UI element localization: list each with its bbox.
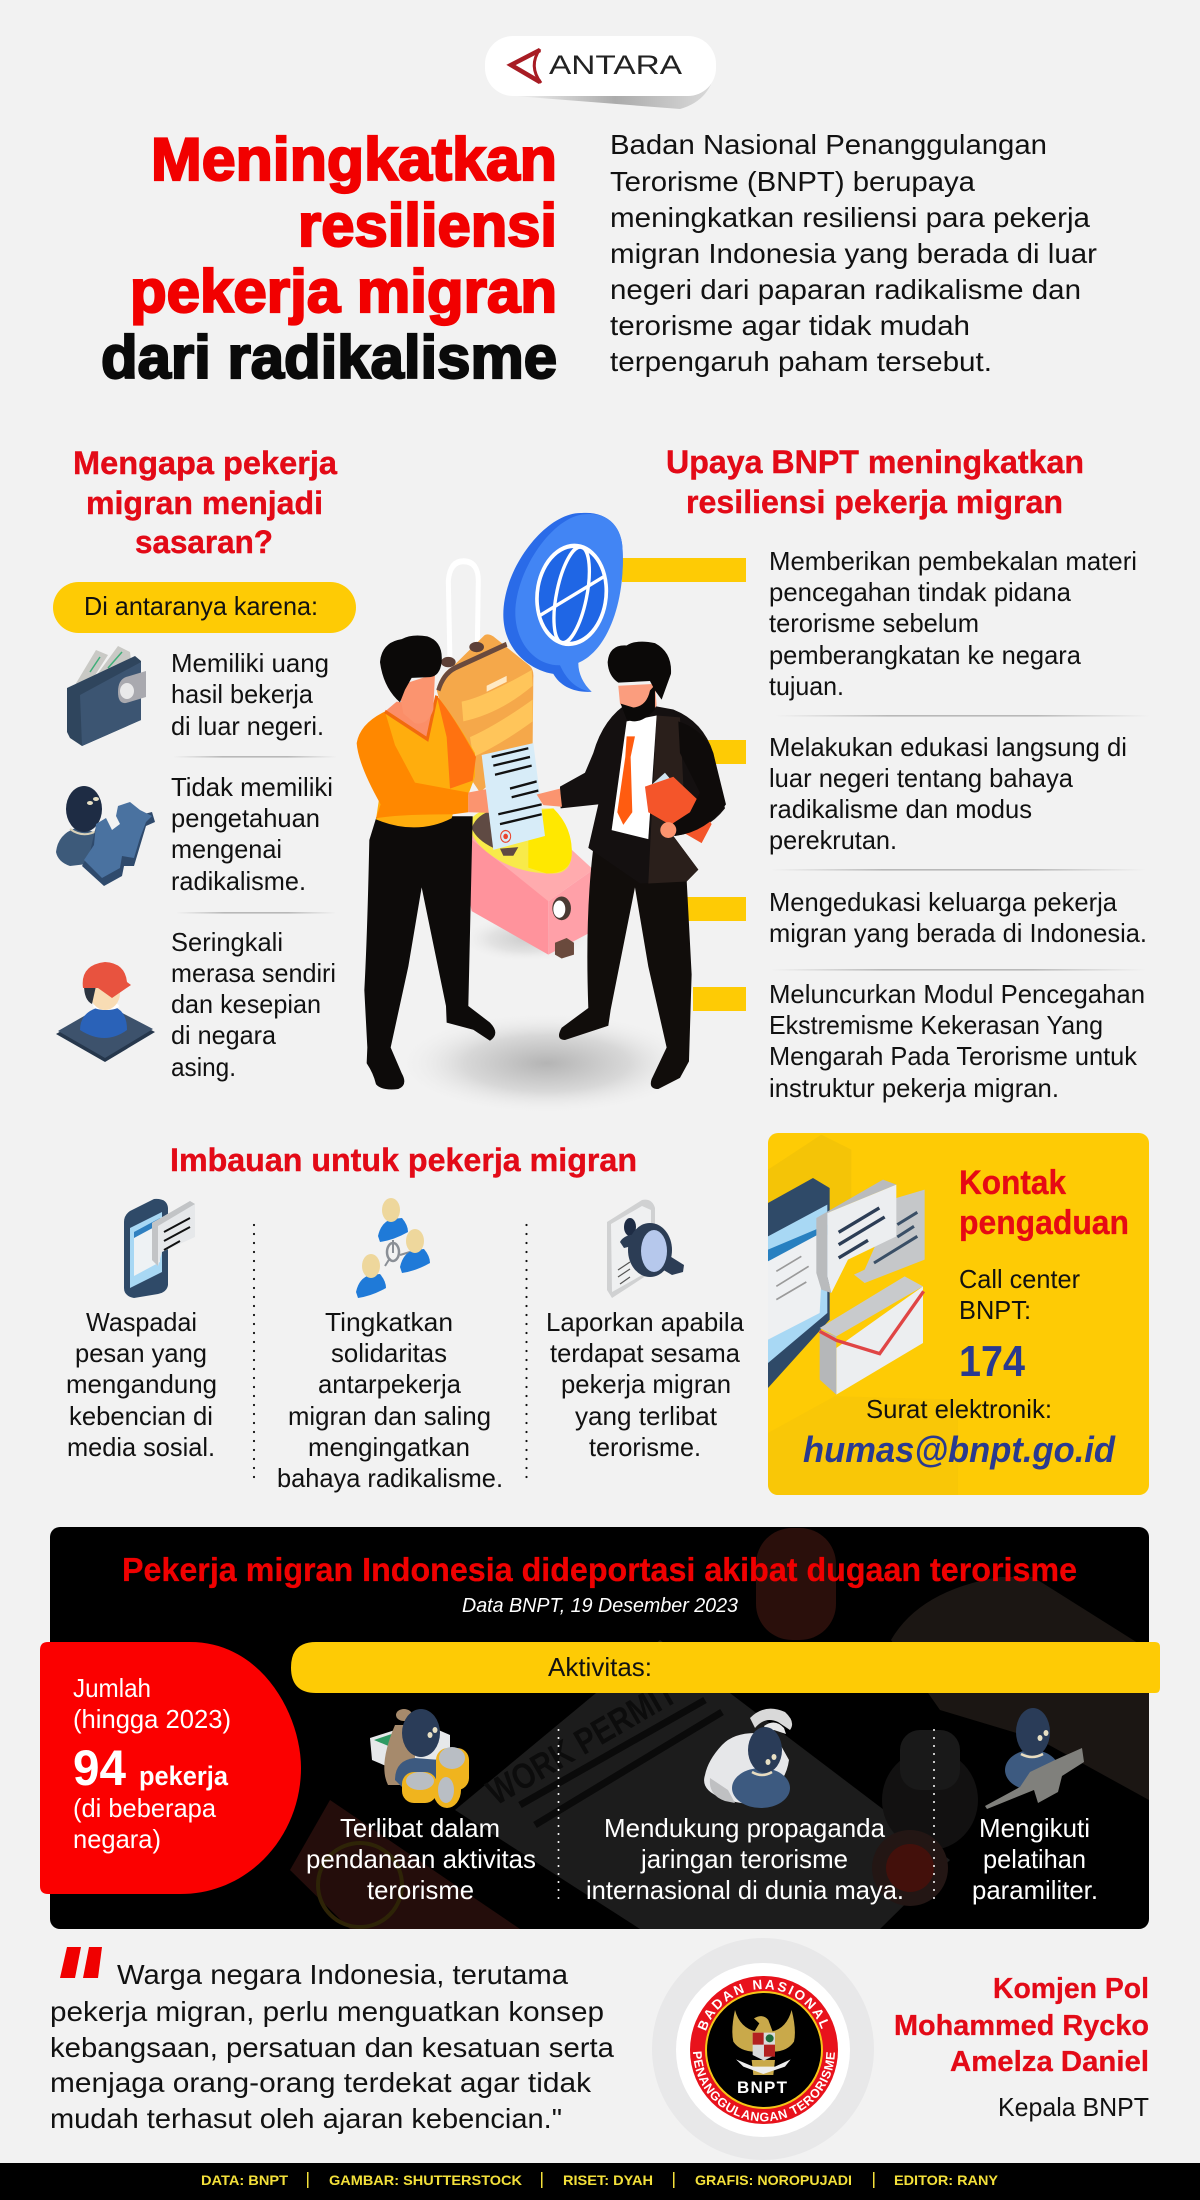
panel: deportation data bbox=[40, 1527, 1160, 1929]
effort 1 text: terorisme sebelum bbox=[769, 608, 979, 638]
effort 4 text: instruktur pekerja migran. bbox=[769, 1073, 1059, 1103]
footer credits: RISET: DYAH bbox=[563, 2172, 653, 2188]
effort 2 text: Melakukan edukasi langsung di bbox=[769, 732, 1127, 762]
activity 2 text: jaringan terorisme bbox=[640, 1844, 848, 1874]
logo: ANTARA bbox=[485, 36, 716, 109]
logo: BNPT emblem bbox=[652, 1938, 874, 2160]
email label: Surat elektronik: bbox=[866, 1394, 1052, 1424]
quote text bbox=[50, 1959, 614, 2134]
activity 3 text: Mengikuti bbox=[979, 1813, 1090, 1843]
appeal 3 text bbox=[546, 1307, 745, 1462]
quote text: kebangsaan, persatuan dan kesatuan serta bbox=[50, 2032, 614, 2063]
footer credits: GAMBAR: SHUTTERSTOCK bbox=[329, 2172, 522, 2188]
connector bars bbox=[622, 558, 746, 1011]
intro text block bbox=[610, 129, 1097, 377]
effort 4 text: Meluncurkan Modul Pencegahan bbox=[769, 979, 1145, 1009]
footer credits bbox=[0, 2163, 1200, 2200]
intro text block: negeri dari paparan radikalisme dan bbox=[610, 274, 1081, 305]
quote text: Warga negara Indonesia, terutama bbox=[117, 1959, 568, 1990]
reason 2 text: radikalisme. bbox=[171, 866, 306, 896]
appeal 2 text: mengingatkan bbox=[308, 1432, 470, 1462]
appeal 1 text: mengandung bbox=[66, 1369, 217, 1399]
icon: cyber propaganda bbox=[704, 1709, 792, 1808]
source note: Data BNPT, 19 Desember 2023 bbox=[462, 1595, 738, 1617]
activity 1 text: pendanaan aktivitas bbox=[306, 1844, 536, 1874]
effort 2 text: radikalisme dan modus bbox=[769, 794, 1032, 824]
appeal 2 text: bahaya radikalisme. bbox=[277, 1463, 503, 1493]
reason 1 text: di luar negeri. bbox=[171, 711, 324, 741]
quote text: mudah terhasut oleh ajaran kebencian." bbox=[50, 2103, 562, 2134]
call center label: Call center bbox=[959, 1264, 1080, 1294]
reason 1 text: hasil bekerja bbox=[171, 679, 314, 709]
icon: wallet bbox=[67, 646, 146, 746]
appeal 3 text: pekerja migran bbox=[561, 1369, 731, 1399]
intro text block: Terorisme (BNPT) berupaya bbox=[610, 166, 975, 197]
quote text: menjaga orang-orang terdekat agar tidak bbox=[50, 2067, 592, 2098]
total count card: Jumlah bbox=[73, 1673, 151, 1703]
effort 4 text: Ekstremisme Kekerasan Yang bbox=[769, 1010, 1103, 1040]
footer credits: DATA: BNPT bbox=[201, 2172, 288, 2188]
activities bar: Aktivitas: bbox=[548, 1652, 652, 1682]
reasons pill: Di antaranya karena: bbox=[84, 591, 318, 621]
effort 1 text: pencegahan tindak pidana bbox=[769, 577, 1072, 607]
reason 3 text: asing. bbox=[171, 1052, 236, 1082]
contact heading: pengaduan bbox=[959, 1204, 1129, 1242]
activity 3 text bbox=[972, 1813, 1098, 1905]
footer credits: GRAFIS: NOROPUJADI bbox=[695, 2172, 852, 2188]
intro text block: migran Indonesia yang berada di luar bbox=[610, 238, 1097, 269]
heading: why targeted: migran menjadi bbox=[86, 485, 323, 521]
appeal 1 text: media sosial. bbox=[67, 1432, 215, 1462]
effort 4 text bbox=[769, 979, 1145, 1103]
reason 2 text bbox=[171, 772, 333, 896]
intro text block: Badan Nasional Penanggulangan bbox=[610, 129, 1047, 160]
heading: why targeted: sasaran? bbox=[135, 524, 273, 560]
icon: phone with message bbox=[124, 1199, 195, 1298]
appeal 1 text: Waspadai bbox=[86, 1307, 197, 1337]
activity 2 text: Mendukung propaganda bbox=[604, 1813, 886, 1843]
reason 3 text: Seringkali bbox=[171, 927, 283, 957]
heading: BNPT efforts bbox=[666, 444, 1084, 520]
icon: magnifier on document bbox=[607, 1200, 684, 1298]
appeal 1 text: kebencian di bbox=[69, 1401, 213, 1431]
effort 1 text: tujuan. bbox=[769, 671, 844, 701]
speaker name: Amelza Daniel bbox=[950, 2046, 1149, 2078]
heading: why targeted: Mengapa pekerja bbox=[73, 445, 337, 481]
reason 1 text: Memiliki uang bbox=[171, 648, 329, 678]
appeal 3 text: Laporkan apabila bbox=[546, 1307, 745, 1337]
appeal 2 text bbox=[277, 1307, 503, 1493]
title bbox=[101, 126, 557, 391]
effort 2 text: perekrutan. bbox=[769, 825, 897, 855]
total count card bbox=[40, 1642, 301, 1894]
speaker name: Mohammed Rycko bbox=[894, 2010, 1149, 2042]
footer credits: EDITOR: RANY bbox=[894, 2172, 999, 2188]
icon: garuda bbox=[732, 2010, 795, 2075]
reason 2 text: Tidak memiliki bbox=[171, 772, 333, 802]
icon: lonely worker with cap bbox=[56, 962, 155, 1062]
total count card: 94 bbox=[73, 1740, 126, 1796]
icon: quote mark bbox=[60, 1947, 102, 1978]
appeal 2 text: solidaritas bbox=[331, 1338, 447, 1368]
effort 1 text: pemberangkatan ke negara bbox=[769, 640, 1082, 670]
panel: complaint contact bbox=[768, 1133, 1149, 1496]
panel title: Pekerja migran Indonesia dideportasi akibat dugaan terorisme bbox=[122, 1551, 1077, 1588]
background: work permit and stamp: WORK PERMIT bbox=[480, 1671, 684, 1813]
activity 1 text: terorisme bbox=[367, 1875, 474, 1905]
reason 1 text bbox=[171, 648, 329, 741]
heading: appeal: Imbauan untuk pekerja migran bbox=[170, 1142, 637, 1178]
heading: why targeted bbox=[73, 445, 337, 560]
activity 2 text bbox=[586, 1813, 904, 1905]
reason 3 text: di negara bbox=[171, 1020, 277, 1050]
icon: terrorist funding bbox=[370, 1709, 469, 1808]
call center number: 174 bbox=[959, 1337, 1025, 1386]
activity 3 text: paramiliter. bbox=[972, 1875, 1098, 1905]
central illustration: two men exchanging document bbox=[357, 513, 726, 1115]
reason 2 text: mengenai bbox=[171, 834, 282, 864]
icon: masked figure with puzzle bbox=[56, 786, 155, 886]
icon: paramilitary training bbox=[985, 1708, 1084, 1809]
heading: BNPT efforts: Upaya BNPT meningkatkan bbox=[666, 444, 1084, 480]
reason 2 text: pengetahuan bbox=[171, 803, 320, 833]
appeal 3 text: terorisme. bbox=[589, 1432, 701, 1462]
appeal 2 text: migran dan saling bbox=[288, 1401, 491, 1431]
logo: BNPT emblem: BNPT bbox=[737, 2078, 788, 2097]
title: dari radikalisme bbox=[101, 324, 557, 391]
heading: BNPT efforts: resiliensi pekerja migran bbox=[686, 484, 1063, 520]
effort 3 text bbox=[769, 887, 1147, 948]
effort 3 text: migran yang berada di Indonesia. bbox=[769, 918, 1147, 948]
total count card: pekerja bbox=[139, 1761, 229, 1791]
effort 4 text: Mengarah Pada Terorisme untuk bbox=[769, 1041, 1138, 1071]
activity 3 text: pelatihan bbox=[983, 1844, 1086, 1874]
effort 1 text: Memberikan pembekalan materi bbox=[769, 546, 1137, 576]
reasons pill bbox=[53, 582, 356, 633]
appeal 2 text: antarpekerja bbox=[318, 1369, 462, 1399]
call center label bbox=[959, 1264, 1080, 1325]
total count card: negara) bbox=[73, 1824, 161, 1854]
activities bar bbox=[291, 1642, 1160, 1693]
logo: BNPT emblem: PENANGGULANGAN TERORISME bbox=[692, 2052, 835, 2122]
reason 3 text: dan kesepian bbox=[171, 989, 321, 1019]
intro text block: meningkatkan resiliensi para pekerja bbox=[610, 202, 1090, 233]
appeal 1 text: pesan yang bbox=[75, 1338, 207, 1368]
activity 1 text: Terlibat dalam bbox=[340, 1813, 500, 1843]
icon: phone, messages and envelope bbox=[768, 1135, 958, 1496]
effort 2 text: luar negeri tentang bahaya bbox=[769, 763, 1074, 793]
title: resiliensi bbox=[298, 192, 557, 259]
activity 2 text: internasional di dunia maya. bbox=[586, 1875, 904, 1905]
reason 3 text bbox=[171, 927, 336, 1082]
speaker name: Komjen Pol bbox=[993, 1973, 1149, 2005]
quote text: pekerja migran, perlu menguatkan konsep bbox=[50, 1996, 604, 2027]
intro text block: terpengaruh paham tersebut. bbox=[610, 346, 992, 377]
effort 2 text bbox=[769, 732, 1127, 855]
speaker name bbox=[894, 1973, 1149, 2078]
email address: humas@bnpt.go.id bbox=[803, 1429, 1116, 1470]
speaker role: Kepala BNPT bbox=[998, 2092, 1149, 2122]
appeal 3 text: yang terlibat bbox=[575, 1401, 718, 1431]
contact heading: Kontak bbox=[959, 1164, 1066, 1202]
contact heading bbox=[959, 1164, 1129, 1242]
logo: ANTARA: ANTARA bbox=[549, 50, 682, 80]
title: Meningkatkan bbox=[151, 126, 557, 193]
appeal 1 text bbox=[66, 1307, 217, 1462]
total count card: (hingga 2023) bbox=[73, 1704, 231, 1734]
icon: connected people bbox=[356, 1198, 430, 1298]
reason 3 text: merasa sendiri bbox=[171, 958, 336, 988]
background: work permit and stamp bbox=[290, 1528, 1149, 1929]
intro text block: terorisme agar tidak mudah bbox=[610, 310, 970, 341]
appeal 3 text: terdapat sesama bbox=[550, 1338, 741, 1368]
appeal 2 text: Tingkatkan bbox=[325, 1307, 453, 1337]
effort 3 text: Mengedukasi keluarga pekerja bbox=[769, 887, 1118, 917]
title: pekerja migran bbox=[130, 258, 557, 325]
activity 1 text bbox=[306, 1813, 536, 1905]
call center label: BNPT: bbox=[959, 1295, 1031, 1325]
total count card: (di beberapa bbox=[73, 1793, 217, 1823]
logo: BNPT emblem: BADAN NASIONAL bbox=[698, 1980, 828, 2031]
effort 1 text bbox=[769, 546, 1137, 701]
